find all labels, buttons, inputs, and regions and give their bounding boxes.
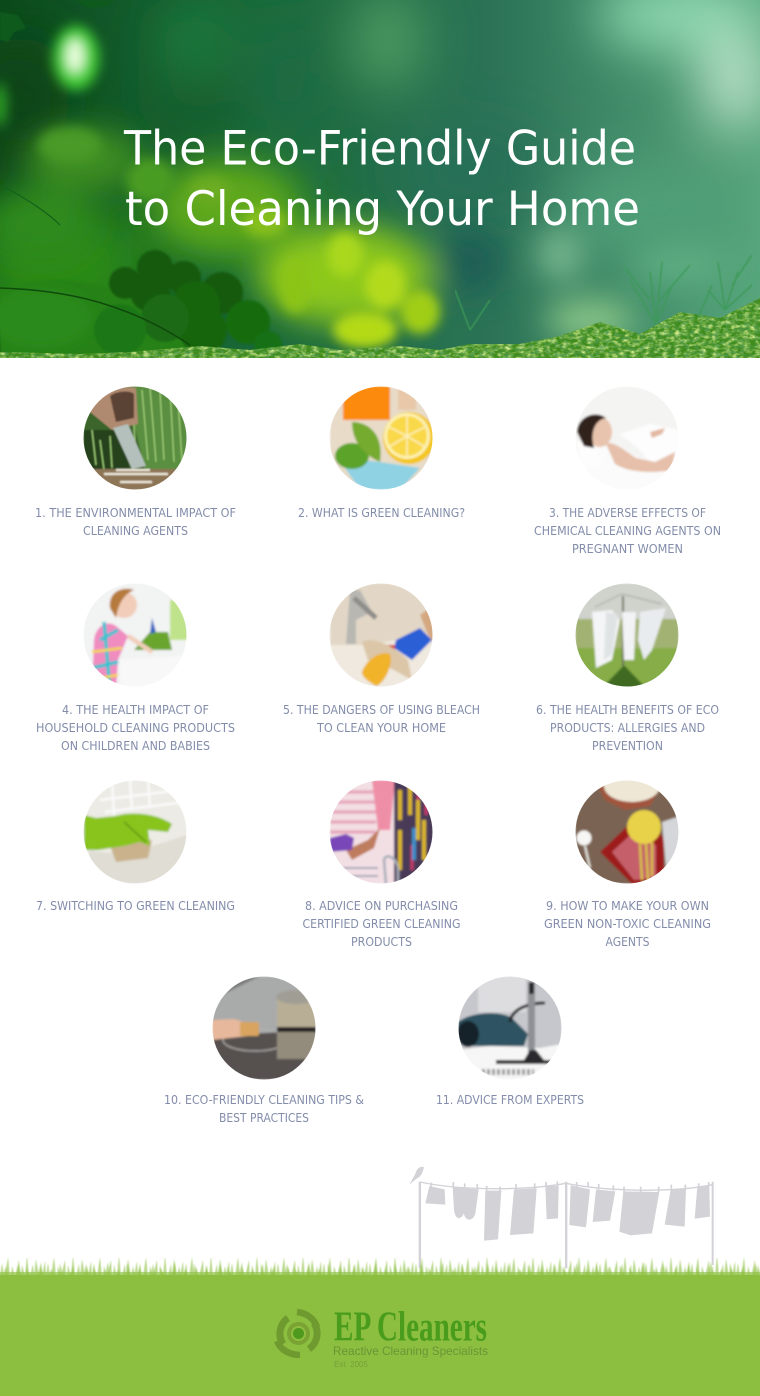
title: to Cleaning Your Home — [125, 182, 640, 237]
label 8 — [302, 899, 460, 949]
label 9 — [544, 899, 711, 949]
topic 7: switching — [36, 780, 235, 913]
top-left leaves — [0, 0, 116, 42]
photo: pregnant woman resting — [576, 386, 678, 474]
label 2: 2. WHAT IS GREEN CLEANING? — [298, 506, 465, 520]
label 6 — [536, 703, 719, 753]
photo: shopper with purple bottle — [330, 780, 434, 884]
label 6: 6. THE HEALTH BENEFITS OF ECO — [536, 703, 719, 717]
label 7: 7. SWITCHING TO GREEN CLEANING — [36, 899, 235, 913]
wordmark: EP Cleaners — [334, 1304, 487, 1350]
grass ground — [0, 1258, 760, 1396]
photo: drain pipe in grass — [83, 386, 190, 490]
topic 4: children and babies — [36, 583, 235, 753]
label 1 — [35, 506, 236, 538]
topic 1: environmental impact — [35, 386, 236, 538]
label 4: HOUSEHOLD CLEANING PRODUCTS — [36, 721, 235, 735]
label 9: AGENTS — [606, 935, 650, 949]
label 9: 9. HOW TO MAKE YOUR OWN — [546, 899, 709, 913]
label 3: PREGNANT WOMEN — [572, 542, 683, 556]
photo: toddler at sink — [83, 583, 190, 690]
title — [123, 122, 640, 237]
established: Est. 2005 — [334, 1359, 368, 1369]
label 5: 5. THE DANGERS OF USING BLEACH — [283, 703, 480, 717]
label 4: 4. THE HEALTH IMPACT OF — [62, 703, 209, 717]
label 5: TO CLEAN YOUR HOME — [316, 721, 446, 735]
label 8: 8. ADVICE ON PURCHASING — [305, 899, 458, 913]
label 6: PREVENTION — [592, 739, 663, 753]
tagline: Reactive Cleaning Specialists — [333, 1344, 488, 1358]
topic 10: tips — [164, 976, 364, 1125]
dark foreground fern — [0, 250, 282, 359]
label 8: CERTIFIED GREEN CLEANING — [302, 917, 460, 931]
moss and grass — [0, 295, 760, 358]
logo icon: swirl — [277, 1312, 317, 1355]
topic 6: health benefits — [536, 583, 719, 753]
blurred lime fern lobes — [38, 127, 440, 348]
label 6: PRODUCTS: ALLERGIES AND — [550, 721, 705, 735]
topic 2: green cleaning — [298, 386, 465, 520]
photo: gloved hands with spray and sponge — [330, 583, 440, 690]
title: The Eco-Friendly Guide — [123, 122, 636, 176]
photo: wiping induction hob — [212, 976, 318, 1080]
label 11: 11. ADVICE FROM EXPERTS — [436, 1093, 584, 1107]
label 10: BEST PRACTICES — [219, 1111, 309, 1125]
label 5 — [283, 703, 480, 735]
topic 11: experts — [436, 976, 584, 1107]
label 4: ON CHILDREN AND BABIES — [61, 739, 210, 753]
photo: laundry on rotary line — [575, 583, 679, 690]
label 4 — [36, 703, 235, 753]
logo — [277, 1304, 488, 1369]
label 3: CHEMICAL CLEANING AGENTS ON — [534, 524, 721, 538]
label 8: PRODUCTS — [351, 935, 412, 949]
label 10 — [164, 1093, 364, 1125]
photo: lemon grater on red plate — [576, 780, 678, 884]
photo: green glove scrubbing — [83, 780, 187, 884]
label 3: 3. THE ADVERSE EFFECTS OF — [549, 506, 706, 520]
label 10: 10. ECO-FRIENDLY CLEANING TIPS & — [164, 1093, 364, 1107]
label 1: CLEANING AGENTS — [83, 524, 188, 538]
topic 9: make your own — [544, 770, 711, 949]
label 3 — [534, 506, 721, 556]
photo: lemon and leaves — [330, 386, 435, 490]
photo: vacuum on carpet — [457, 976, 562, 1080]
bird — [409, 1167, 424, 1185]
label 9: GREEN NON-TOXIC CLEANING — [544, 917, 711, 931]
bokeh glow — [0, 26, 99, 127]
hero photo: green foliage — [0, 0, 760, 359]
label 1: 1. THE ENVIRONMENTAL IMPACT OF — [35, 506, 236, 520]
topic 5: bleach — [283, 583, 480, 735]
poles and line — [419, 1181, 714, 1268]
laundry items — [425, 1185, 710, 1241]
clothesline silhouette — [409, 1167, 714, 1268]
topic 8: purchasing — [302, 780, 460, 949]
topic 3: pregnant women — [534, 386, 721, 556]
